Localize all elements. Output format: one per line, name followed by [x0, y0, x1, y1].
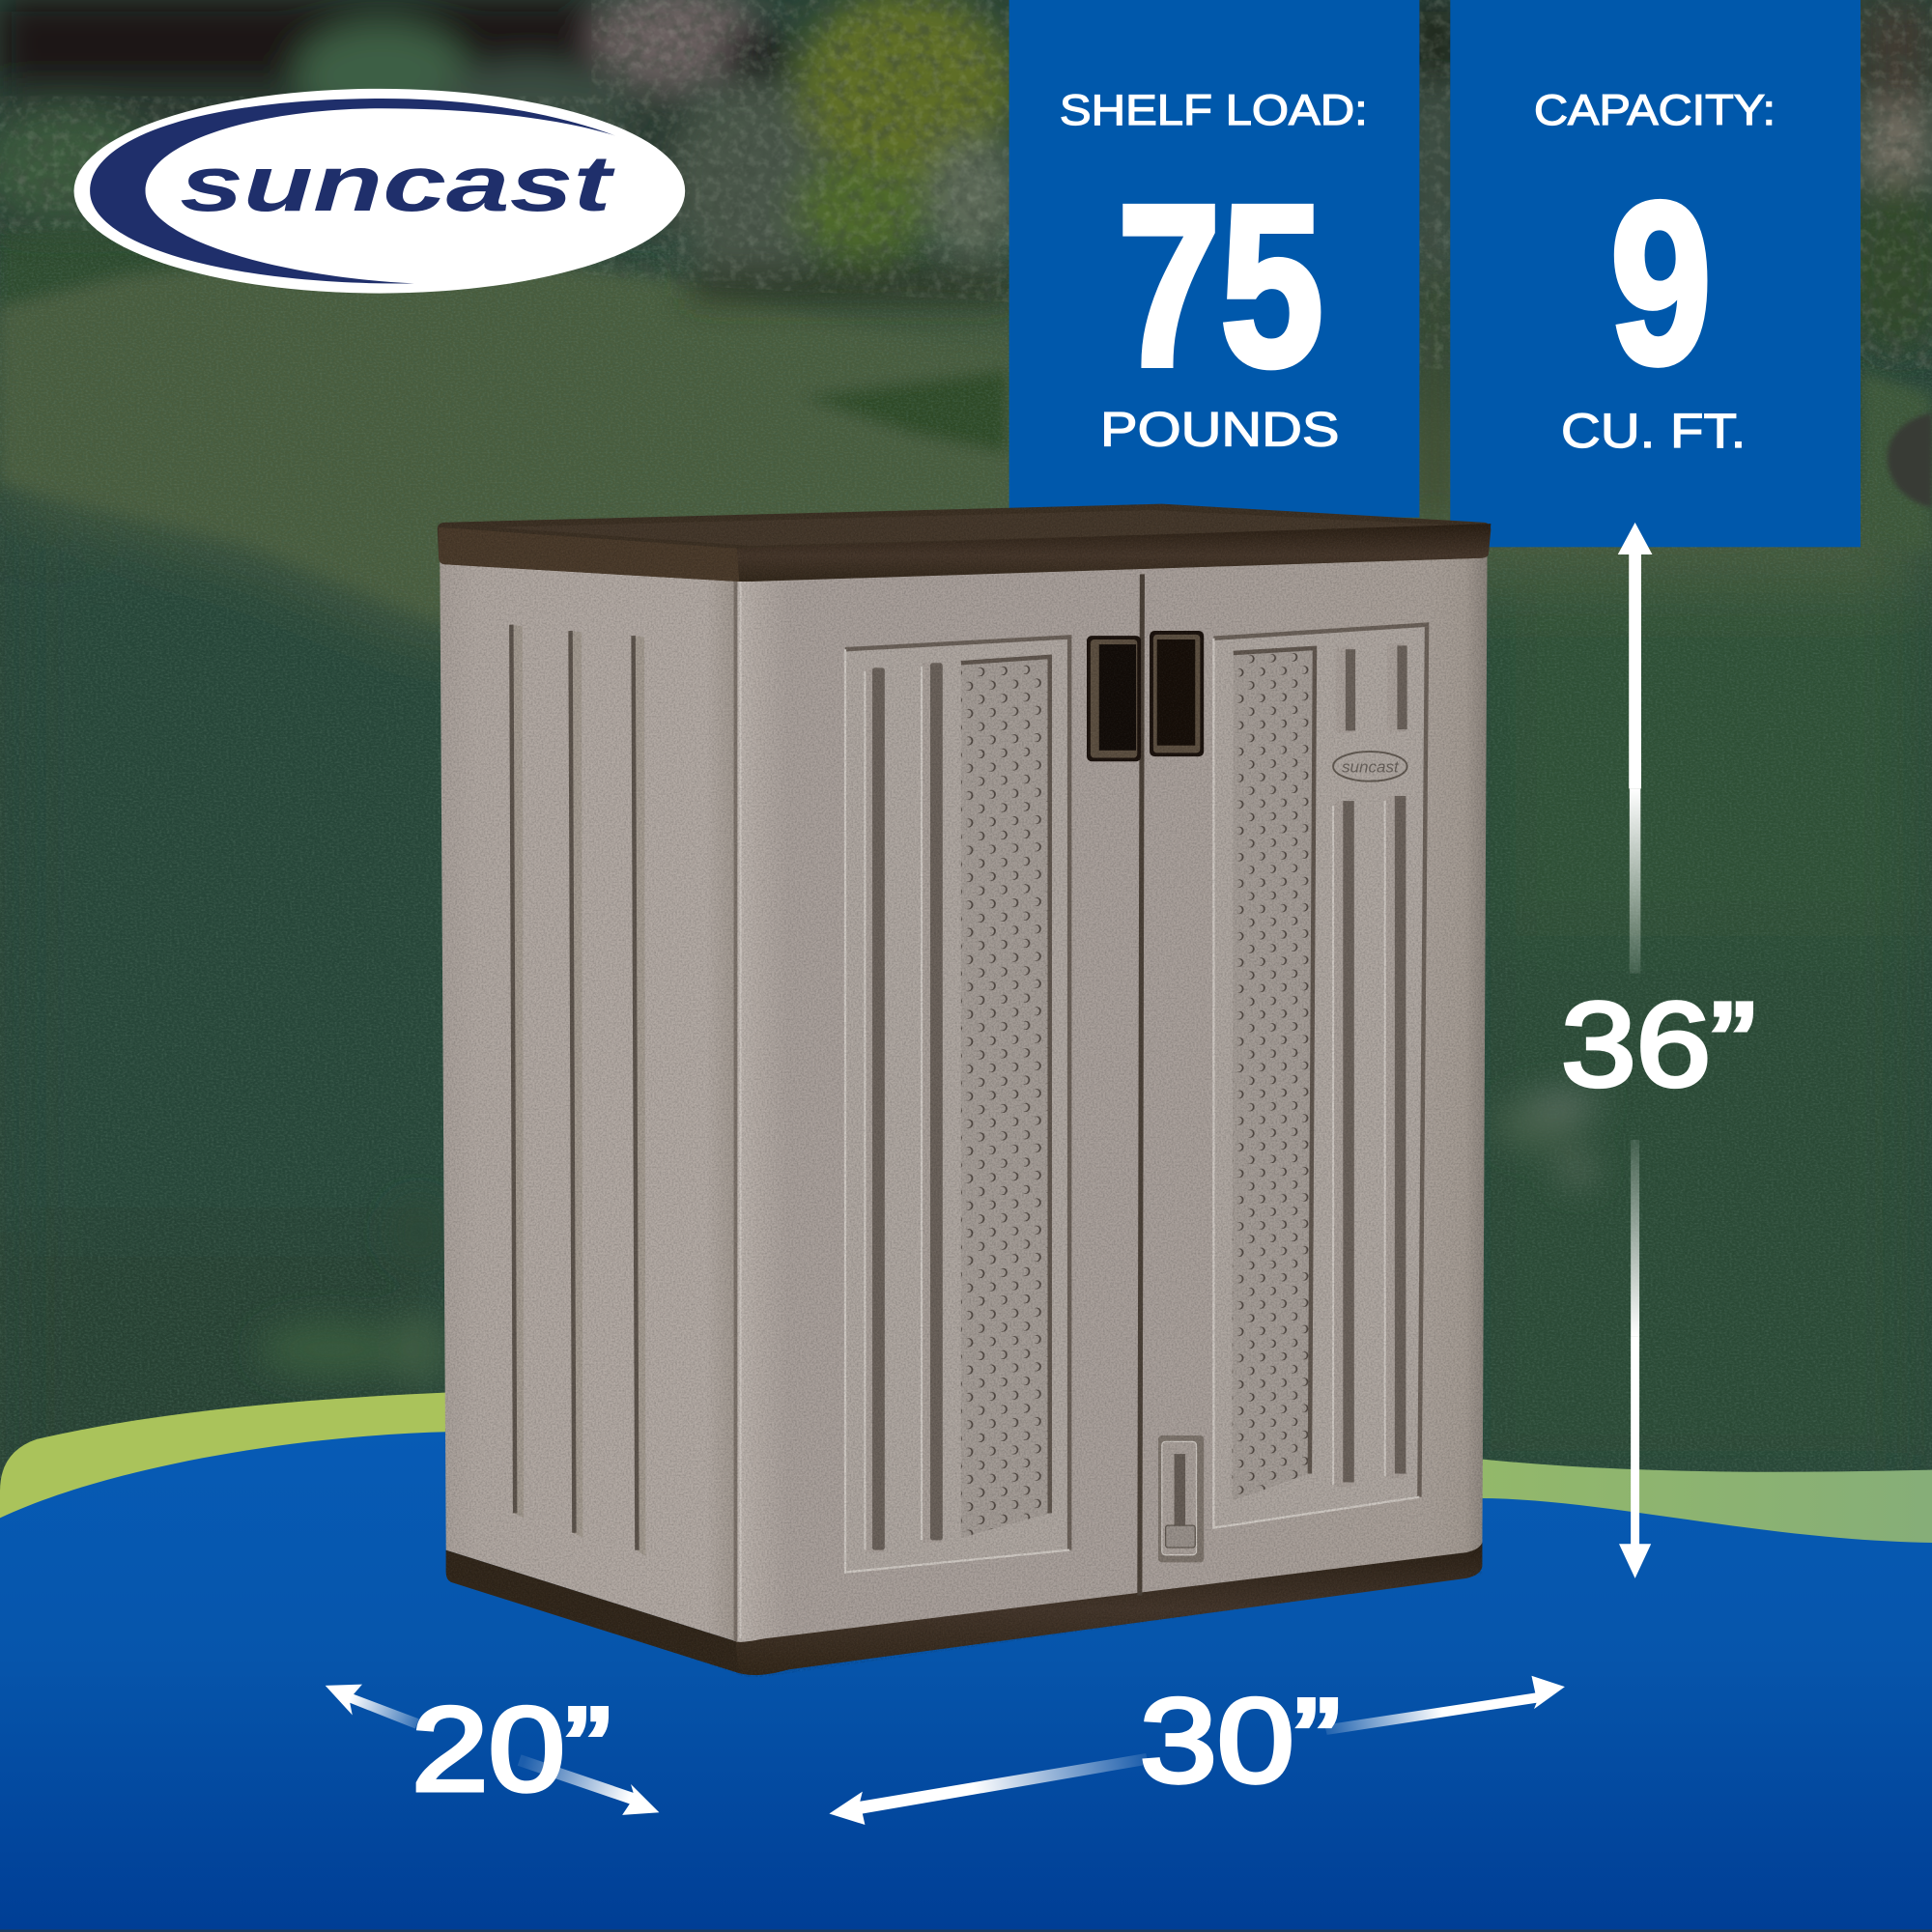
right door panel [1213, 625, 1427, 1528]
door latch [1158, 1435, 1204, 1562]
dimension: height 36: 36” [1561, 979, 1756, 1112]
floor: blue curved area [0, 1432, 1932, 1932]
door handles [1087, 631, 1204, 761]
label: cubic feet: CU. FT. [1561, 404, 1746, 458]
logo: suncast oval [74, 89, 685, 294]
cabinet: surface texture [431, 499, 1497, 1682]
cabinet: lid [438, 504, 1491, 582]
cabinet: left side [440, 560, 735, 1641]
door gap [1140, 574, 1142, 1596]
label: shelf load: SHELF LOAD: [1060, 87, 1368, 134]
dimension: depth 20: 20” [412, 1683, 611, 1816]
embossed door logo: suncast [1342, 758, 1400, 777]
arrow: height [1618, 523, 1652, 1578]
embossed door logo [1333, 752, 1407, 781]
number: 75: 75 [1118, 158, 1323, 414]
label: pounds: POUNDS [1100, 403, 1339, 457]
foliage [0, 0, 1932, 1386]
arrow: depth [326, 1685, 659, 1815]
left door panel [845, 637, 1069, 1573]
cabinet: front [735, 554, 1488, 1642]
panel: capacity [1450, 0, 1861, 547]
floor: green swoosh [0, 1392, 1932, 1565]
panel: shelf load [1009, 0, 1419, 518]
number: 9: 9 [1610, 156, 1712, 412]
cabinet: base [446, 1543, 1482, 1675]
arrow: width [829, 1676, 1565, 1825]
grass texture [0, 222, 1932, 1479]
dimension: width 30: 30” [1140, 1674, 1341, 1807]
rock [1888, 412, 1932, 508]
bottom edge line [0, 1929, 1932, 1932]
logo: suncast oval: suncast [180, 140, 615, 228]
product: storage cabinet [431, 499, 1497, 1682]
background: garden scene [0, 0, 1932, 1478]
label: capacity: CAPACITY: [1534, 87, 1776, 134]
